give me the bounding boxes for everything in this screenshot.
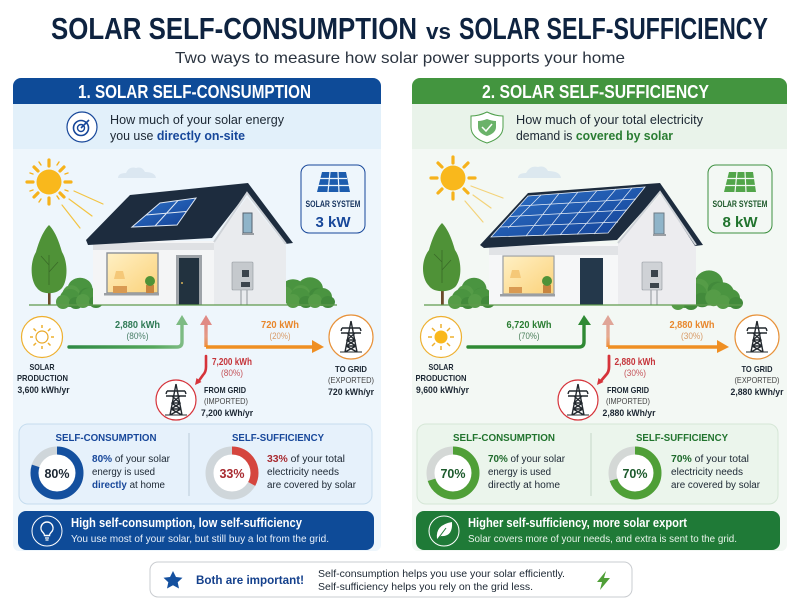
solar production node: PRODUCTION <box>17 373 68 383</box>
metric: self-sufficiency: 70% <box>622 467 648 481</box>
metric: self-sufficiency: are covered by solar <box>671 480 761 491</box>
metric: self-sufficiency: electricity needs <box>267 467 339 478</box>
metric: self-sufficiency: SELF-SUFFICIENCY <box>636 432 728 444</box>
metric: self-consumption <box>430 432 566 496</box>
metrics card <box>417 424 778 504</box>
metric: self-sufficiency <box>210 432 357 496</box>
metric: self-consumption: 70% <box>440 467 466 481</box>
tree <box>32 225 66 305</box>
solar production node: SOLAR <box>428 362 454 372</box>
solar production node: 9,600 kWh/yr <box>416 385 469 395</box>
metric: self-consumption: energy is used <box>488 467 551 478</box>
arrow: export to grid: (30%) <box>681 331 703 341</box>
icon: star <box>164 571 182 588</box>
solar production node <box>416 316 469 395</box>
arrow: export to grid: 720 kWh <box>261 319 299 331</box>
arrow: export to grid: 2,880 kWh <box>670 319 714 331</box>
subtitle: Two ways to measure how solar power supports your home <box>175 50 625 67</box>
solar system badge <box>301 165 365 233</box>
from grid node <box>558 380 656 420</box>
footer explanation: Self-consumption helps you use your solar efficiently. <box>318 569 565 580</box>
takeaway banner <box>416 511 780 550</box>
metric: self-consumption: 70% of your solar <box>488 454 566 465</box>
metric: self-sufficiency: 70% of your total <box>671 454 749 465</box>
panel: self-sufficiency <box>412 78 787 551</box>
arrow: export to grid <box>602 315 729 353</box>
arrow: solar to home <box>468 315 591 347</box>
arrow: export to grid: (20%) <box>270 331 290 341</box>
metric: self-sufficiency: 33% of your total <box>267 454 345 465</box>
footer callout <box>150 562 632 597</box>
arrow: from grid: (80%) <box>221 368 243 378</box>
panel header <box>412 78 787 104</box>
metric: self-consumption: SELF-CONSUMPTION <box>56 432 156 444</box>
takeaway banner: High self-consumption, low self-sufficiency <box>71 516 302 530</box>
icon: target <box>67 112 97 142</box>
solar system badge: SOLAR SYSTEM <box>712 199 768 209</box>
from grid node: FROM GRID <box>607 385 649 395</box>
metric: self-consumption: directly at home <box>488 480 560 491</box>
metric: self-sufficiency: are covered by solar <box>267 480 357 491</box>
question text: How much of your solar energy <box>110 112 284 127</box>
title: SOLAR SELF-CONSUMPTION <box>51 11 417 46</box>
to grid node: TO GRID <box>742 364 772 374</box>
door <box>580 258 603 305</box>
takeaway banner <box>18 511 374 550</box>
window <box>104 253 159 296</box>
to grid node: 720 kWh/yr <box>328 387 374 397</box>
panel header: 2. SOLAR SELF-SUFFICIENCY <box>482 82 709 102</box>
panel header <box>13 78 381 104</box>
cloud <box>118 168 156 178</box>
inverter <box>642 262 662 305</box>
bushes <box>56 277 335 309</box>
arrow: solar to home: 2,880 kWh <box>115 319 160 331</box>
title <box>51 11 768 46</box>
solar system badge: SOLAR SYSTEM <box>306 199 360 209</box>
metric: self-sufficiency: electricity needs <box>671 467 743 478</box>
metric: self-consumption: SELF-CONSUMPTION <box>453 432 555 444</box>
arrow: from grid: 7,200 kWh <box>212 356 252 368</box>
bushes <box>448 270 743 310</box>
icon: shield <box>471 112 503 143</box>
takeaway banner: Higher self-sufficiency, more solar export <box>468 516 688 530</box>
door <box>176 255 202 305</box>
icon: light bulb <box>32 516 62 546</box>
metric: self-sufficiency: 33% <box>219 467 245 481</box>
arrow: from grid <box>195 356 252 385</box>
question text: demand is covered by solar <box>516 128 673 143</box>
arrow: solar to home: (70%) <box>518 331 540 341</box>
to grid node: 2,880 kWh/yr <box>730 387 784 397</box>
arrow: solar to home: 6,720 kWh <box>506 319 552 331</box>
panel: self-consumption <box>13 78 381 551</box>
metric: self-consumption: 80% of your solar <box>92 454 171 465</box>
question text <box>516 112 703 143</box>
icon: leaf <box>429 516 459 546</box>
footer explanation <box>318 569 565 593</box>
arrow: from grid: 2,880 kWh <box>614 356 656 368</box>
from grid node: 7,200 kWh/yr <box>201 408 253 418</box>
metric: self-consumption: directly at home <box>92 480 165 491</box>
metric: self-consumption: energy is used <box>92 467 155 478</box>
small window <box>242 213 254 235</box>
cloud <box>518 166 561 178</box>
solar production node: 3,600 kWh/yr <box>18 385 70 395</box>
house <box>424 183 742 305</box>
question text <box>110 112 284 143</box>
arrow: export to grid <box>200 315 324 353</box>
arrow: from grid: (30%) <box>624 368 646 378</box>
from grid node: FROM GRID <box>204 385 246 395</box>
solar panels <box>491 187 645 237</box>
icon: lightning bolt <box>597 571 610 590</box>
from grid node: 2,880 kWh/yr <box>602 408 656 418</box>
solar production node: PRODUCTION <box>416 373 466 383</box>
solar system badge: 8 kW <box>722 214 758 231</box>
arrow: solar to home <box>69 315 188 347</box>
solar panel <box>132 198 196 227</box>
metric: self-consumption <box>34 432 171 496</box>
solar production node <box>17 316 70 395</box>
solar system badge <box>708 165 772 233</box>
arrow: solar to home: (80%) <box>126 331 148 341</box>
inverter <box>232 262 253 305</box>
from grid node: (IMPORTED) <box>204 396 248 406</box>
from grid node <box>156 380 253 420</box>
title: vs <box>426 19 451 44</box>
to grid node: TO GRID <box>335 364 367 374</box>
to grid node: (EXPORTED) <box>734 375 780 385</box>
takeaway banner: You use most of your solar, but still buy a lot from the grid. <box>71 534 329 545</box>
question text: How much of your total electricity <box>516 112 703 127</box>
metric: self-sufficiency: SELF-SUFFICIENCY <box>232 432 324 444</box>
panel header: 1. SOLAR SELF-CONSUMPTION <box>78 82 311 102</box>
from grid node: (IMPORTED) <box>606 396 650 406</box>
to grid node: (EXPORTED) <box>328 375 374 385</box>
to grid node <box>730 315 784 397</box>
icon: sun <box>431 157 503 222</box>
metrics card <box>19 424 372 504</box>
footer explanation: Self-sufficiency helps you rely on the grid less. <box>318 582 533 593</box>
solar system badge: 3 kW <box>315 214 351 231</box>
to grid node <box>328 315 374 397</box>
metric: self-sufficiency <box>612 432 761 496</box>
tree <box>423 223 460 305</box>
small window <box>653 213 666 236</box>
solar production node: SOLAR <box>30 362 54 372</box>
metric: self-consumption: 80% <box>44 467 70 481</box>
icon: sun <box>27 160 103 228</box>
takeaway banner: Solar covers more of your needs, and extra is sent to the grid. <box>468 534 737 545</box>
arrow: from grid <box>597 356 656 385</box>
house <box>29 183 337 305</box>
window <box>500 256 555 296</box>
question text: you use directly on-site <box>110 128 245 143</box>
footer callout: Both are important! <box>196 573 304 587</box>
